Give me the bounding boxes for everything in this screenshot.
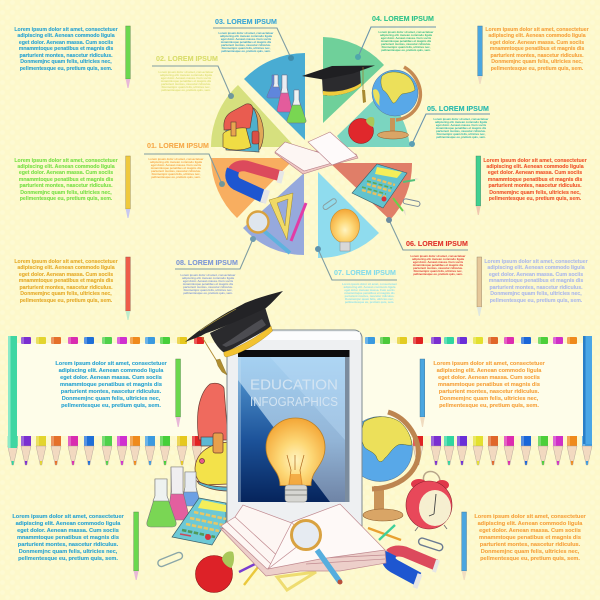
icon: tablet light bulb [266,418,325,502]
heading 02: 02. LOREM IPSUM [156,55,218,63]
text block E: pellmentesque eu, pretium quis, sem. [489,196,581,202]
description 07: adipiscing elit. Aenean commodo ligula [344,285,395,289]
icon: alarm clock [406,472,452,531]
description 02: parturient montes, nascetur ridiculus. [161,82,211,86]
text block E: adipiscing elit. Aenean commodo ligula [486,164,584,170]
description 04: Donmemjnc quam felis, ultricies nec, [382,45,430,49]
text block E: mnammtoque penatibus et magnis dis [488,177,582,183]
leader 03 [213,28,294,61]
icon: small paperclip [322,198,337,210]
tablet title: EDUCATION [250,376,338,394]
description 03: Donmemjnc quam felis, ultricies nec, [222,46,270,50]
text block A: parturient montes, nascetur ridiculus. [19,53,113,59]
description 05: mnammtoque penatibus et magnis dis [436,126,486,130]
text block D: Lorem ipsum dolor sit amet, consectetuer [485,27,589,33]
description 07 [342,282,397,304]
icon: large magnifier [292,520,342,584]
text block B: pellmentesque eu, pretium quis, sem. [20,196,112,202]
icon: small graduation cap [302,66,375,103]
description 08 [180,272,236,295]
text block J: pellmentesque eu, pretium quis, sem. [480,556,580,562]
text block F: Donmemjnc quam felis, ultricies nec, [490,291,582,297]
description 05: parturient montes, nascetur ridiculus. [436,129,486,133]
description 03: mnammtoque penatibus et magnis dis [221,40,271,44]
text block A [14,27,118,72]
description 04: Lorem ipsum dolor sit amet, consectetuer [378,30,434,34]
text block J: Lorem ipsum dolor sit amet, consectetuer [474,514,586,520]
text block J: Donmemjnc quam felis, ultricies nec, [481,549,579,555]
description 06: pellmentesque eu, pretium quis, sem. [413,272,463,276]
description 03: pellmentesque eu, pretium quis, sem. [221,49,271,53]
text block F [484,259,588,304]
pencil: text J [462,512,466,580]
text block D: adipiscing elit. Aenean commodo ligula [488,33,586,39]
description 02: Lorem ipsum dolor sit amet, consectetuer [158,70,214,74]
description 05: pellmentesque eu, pretium quis, sem. [436,135,486,139]
text block C: Lorem ipsum dolor sit amet, consectetuer [14,259,118,265]
icon: small pink pencil [291,203,306,241]
description 06: eget dolor. Aenean massa. Cum sociis [413,260,463,264]
text block A: Donmemjnc quam felis, ultricies nec, [20,59,112,65]
text block B: eget dolor. Aenean massa. Cum sociis [19,170,113,176]
text block A: mnammtoque penatibus et magnis dis [19,46,113,52]
description 01: Lorem ipsum dolor sit amet, consectetuer [148,156,204,160]
description 05: adipiscing elit. Aenean commodo ligula [435,120,487,124]
tablet subtitle: INFOGRAPHICS [250,395,338,409]
text block F: mnammtoque penatibus et magnis dis [489,278,583,284]
heading 05: 05. LOREM IPSUM [427,105,489,113]
text block D: pellmentesque eu, pretium quis, sem. [491,66,583,72]
description 02: pellmentesque eu, pretium quis, sem. [161,88,211,92]
text block H: adipiscing elit. Aenean commodo ligula [437,368,541,374]
leader 06 [386,217,468,250]
text block B: Lorem ipsum dolor sit amet, consectetuer [14,158,118,164]
text block G: mnammtoque penatibus et magnis dis [60,382,162,388]
text block A: Lorem ipsum dolor sit amet, consectetuer [14,27,118,33]
pencil row: bottom left [8,436,202,465]
pencil: text E [476,156,481,215]
description 01: Donmemjnc quam felis, ultricies nec, [152,172,200,176]
text block J [474,514,586,562]
icon: pencils near globe [368,525,401,540]
icon: large open book [220,504,386,576]
description 02 [158,70,214,92]
heading 03: 03. LOREM IPSUM [215,18,277,26]
description 08: eget dolor. Aenean massa. Cum sociis [183,279,233,283]
text block E [483,158,587,202]
description 03 [218,31,274,53]
leader 01 [144,154,225,187]
description 07: Lorem ipsum dolor sit amet, consectetuer [342,282,397,286]
description 07: mnammtoque penatibus et magnis dis [344,291,395,295]
wedge 02 yellow green [211,85,295,147]
description 08: adipiscing elit. Aenean commodo ligula [182,276,234,280]
description 08: mnammtoque penatibus et magnis dis [183,282,233,286]
description 06: mnammtoque penatibus et magnis dis [413,263,463,267]
text block I: Lorem ipsum dolor sit amet, consectetuer [12,514,124,520]
description 02: eget dolor. Aenean massa. Cum sociis [161,76,211,80]
text block D: parturient montes, nascetur ridiculus. [490,53,584,59]
wedge 01 orange [211,158,295,218]
description 02: Donmemjnc quam felis, ultricies nec, [162,85,210,89]
text block F: parturient montes, nascetur ridiculus. [489,285,583,291]
icon: small backpack [223,104,263,152]
panel: right pencil frame [362,343,586,436]
text block G: eget dolor. Aenean massa. Cum sociis [60,375,162,381]
icon: small globe [372,67,420,139]
pencil: tall left frame [8,336,17,448]
description 06: adipiscing elit. Aenean commodo ligula [412,257,464,261]
text block H [433,361,545,409]
panel: left pencil frame [15,343,227,436]
icon: large magnet [389,551,438,588]
text block F: eget dolor. Aenean massa. Cum sociis [489,272,583,278]
text block G [55,361,167,409]
icon: small calculator [352,164,407,208]
description 08: Lorem ipsum dolor sit amet, consectetuer [180,272,236,276]
pencil: text I [134,512,138,580]
text block E: Donmemjnc quam felis, ultricies nec, [489,190,581,196]
text block C: parturient montes, nascetur ridiculus. [19,285,113,291]
text block C: Donmemjnc quam felis, ultricies nec, [20,291,112,297]
icon: large clip near magnet [418,537,444,552]
description 06 [410,254,466,276]
description 04: adipiscing elit. Aenean commodo ligula [380,33,432,37]
description 02: adipiscing elit. Aenean commodo ligula [160,73,212,77]
icon: pencils near apple [239,564,258,585]
text block H: mnammtoque penatibus et magnis dis [438,382,540,388]
pencil: text G [176,359,180,427]
text block E: parturient montes, nascetur ridiculus. [488,183,582,189]
pencil row: top left stubs [21,337,204,344]
text block G: adipiscing elit. Aenean commodo ligula [59,368,163,374]
text block C [14,259,118,304]
icon: large calculator [172,498,226,545]
pencil row: bottom right [413,436,592,465]
heading 07: 07. LOREM IPSUM [334,269,396,277]
icon: large graduation cap [185,291,283,375]
description 08: Donmemjnc quam felis, ultricies nec, [184,288,232,292]
pencil: text B [126,156,130,218]
description 07: eget dolor. Aenean massa. Cum sociis [344,288,395,292]
icon: small triangle ruler [269,193,293,240]
description 08: pellmentesque eu, pretium quis, sem. [183,291,233,295]
icon: small apple [348,117,374,144]
icon: small pencils [393,178,419,216]
text block H: Donmemjnc quam felis, ultricies nec, [440,396,538,402]
text block J: eget dolor. Aenean massa. Cum sociis [479,528,581,534]
text block J: adipiscing elit. Aenean commodo ligula [478,521,582,527]
text block D: Donmemjnc quam felis, ultricies nec, [491,59,583,65]
icon: large backpack [195,383,228,491]
description 07: pellmentesque eu, pretium quis, sem. [345,300,394,304]
heading 08: 08. LOREM IPSUM [176,259,238,267]
description 04: eget dolor. Aenean massa. Cum sociis [381,36,431,40]
text block I: pellmentesque eu, pretium quis, sem. [18,556,118,562]
description 05: Donmemjnc quam felis, ultricies nec, [437,132,485,136]
icon: large paperclip [157,551,184,568]
icon: ruler under book [277,572,316,590]
text block F: adipiscing elit. Aenean commodo ligula [487,265,585,271]
description 03: eget dolor. Aenean massa. Cum sociis [221,37,271,41]
text block A: adipiscing elit. Aenean commodo ligula [17,33,115,39]
wedge 04 green [323,37,384,123]
pencil: tall right frame [583,336,592,444]
text block B: adipiscing elit. Aenean commodo ligula [17,164,115,170]
description 06: Donmemjnc quam felis, ultricies nec, [414,269,462,273]
pencil: text H [420,359,425,427]
text block H: parturient montes, nascetur ridiculus. [439,389,539,395]
description 02: mnammtoque penatibus et magnis dis [161,79,211,83]
text block G: pellmentesque eu, pretium quis, sem. [61,403,161,409]
text block I: mnammtoque penatibus et magnis dis [17,535,119,541]
icon: small light bulb [330,209,360,251]
text block I [12,514,124,562]
description 01: pellmentesque eu, pretium quis, sem. [151,175,201,179]
text block I: parturient montes, nascetur ridiculus. [18,542,118,548]
description 06: parturient montes, nascetur ridiculus. [413,266,463,270]
text block C: mnammtoque penatibus et magnis dis [19,278,113,284]
icon: large flasks [147,467,200,527]
text block H: Lorem ipsum dolor sit amet, consectetuer [433,361,545,367]
text block B: parturient montes, nascetur ridiculus. [19,183,113,189]
pencil row: top right stubs [365,337,577,344]
description 01: eget dolor. Aenean massa. Cum sociis [151,163,201,167]
text block A: eget dolor. Aenean massa. Cum sociis [19,40,113,46]
icon: small magnet [232,166,282,203]
description 04: mnammtoque penatibus et magnis dis [381,39,431,43]
description 05: Lorem ipsum dolor sit amet, consectetuer [433,116,489,120]
wedge 03 blue [244,53,305,140]
text block I: adipiscing elit. Aenean commodo ligula [16,521,120,527]
text block H: eget dolor. Aenean massa. Cum sociis [438,375,540,381]
text block D: eget dolor. Aenean massa. Cum sociis [490,40,584,46]
icon: small flasks [267,75,306,123]
pencil: text D [478,26,482,84]
text block A: pellmentesque eu, pretium quis, sem. [20,66,112,72]
description 05 [433,116,489,139]
text block B [14,158,118,202]
icon: small magnifier [248,212,290,253]
text block I: Donmemjnc quam felis, ultricies nec, [19,549,117,555]
icon: large globe [348,412,418,521]
icon: large apple [196,551,234,592]
description 01: parturient montes, nascetur ridiculus. [151,169,201,173]
text block G: Lorem ipsum dolor sit amet, consectetuer [55,361,167,367]
description 01: adipiscing elit. Aenean commodo ligula [150,160,202,164]
description 05: eget dolor. Aenean massa. Cum sociis [436,123,486,127]
icon: open book [275,132,358,174]
heading 01: 01. LOREM IPSUM [147,142,209,150]
description 04: pellmentesque eu, pretium quis, sem. [381,48,431,52]
text block I: eget dolor. Aenean massa. Cum sociis [17,528,119,534]
description 03: Lorem ipsum dolor sit amet, consectetuer [218,31,274,35]
pencil: text F [477,257,482,316]
wedge 08 periwinkle [243,173,304,255]
text block F: pellmentesque eu, pretium quis, sem. [490,298,582,304]
description 03: parturient montes, nascetur ridiculus. [221,43,271,47]
text block G: Donmemjnc quam felis, ultricies nec, [62,396,160,402]
description 01 [148,156,204,179]
heading 06: 06. LOREM IPSUM [406,240,468,248]
text block C: adipiscing elit. Aenean commodo ligula [17,265,115,271]
text block E: eget dolor. Aenean massa. Cum sociis [488,170,582,176]
leader 05 [409,114,490,147]
description 07: Donmemjnc quam felis, ultricies nec, [345,297,394,301]
description 08: parturient montes, nascetur ridiculus. [183,285,233,289]
heading 04: 04. LOREM IPSUM [372,15,434,23]
wedge 05 teal [337,92,410,147]
description 06: Lorem ipsum dolor sit amet, consectetuer [410,254,466,258]
description 04: parturient montes, nascetur ridiculus. [381,42,431,46]
text block F: Lorem ipsum dolor sit amet, consectetuer [484,259,588,265]
leader 08 [175,236,256,269]
description 01: mnammtoque penatibus et magnis dis [151,166,201,170]
text block E: Lorem ipsum dolor sit amet, consectetuer [483,158,587,164]
leader 02 [152,66,234,99]
description 03: adipiscing elit. Aenean commodo ligula [220,34,272,38]
description 07: parturient montes, nascetur ridiculus. [345,294,394,298]
text block D: mnammtoque penatibus et magnis dis [490,46,584,52]
leader 07 [315,246,397,280]
tablet [227,330,362,535]
text block J: mnammtoque penatibus et magnis dis [479,535,581,541]
description 04 [378,30,434,52]
text block B: Donmemjnc quam felis, ultricies nec, [20,190,112,196]
wedge 07 light blue [318,172,379,258]
text block J: parturient montes, nascetur ridiculus. [480,542,580,548]
text block C: pellmentesque eu, pretium quis, sem. [20,298,112,304]
text block H: pellmentesque eu, pretium quis, sem. [439,403,539,409]
pencil: text A [126,26,130,88]
text block B: mnammtoque penatibus et magnis dis [19,177,113,183]
text block D [485,27,589,72]
wedge 06 salmon [330,163,412,220]
text block C: eget dolor. Aenean massa. Cum sociis [19,272,113,278]
leader 04 [355,27,436,60]
text block G: parturient montes, nascetur ridiculus. [61,389,161,395]
pencil: text C [126,257,130,320]
icon: small clip [403,198,420,207]
